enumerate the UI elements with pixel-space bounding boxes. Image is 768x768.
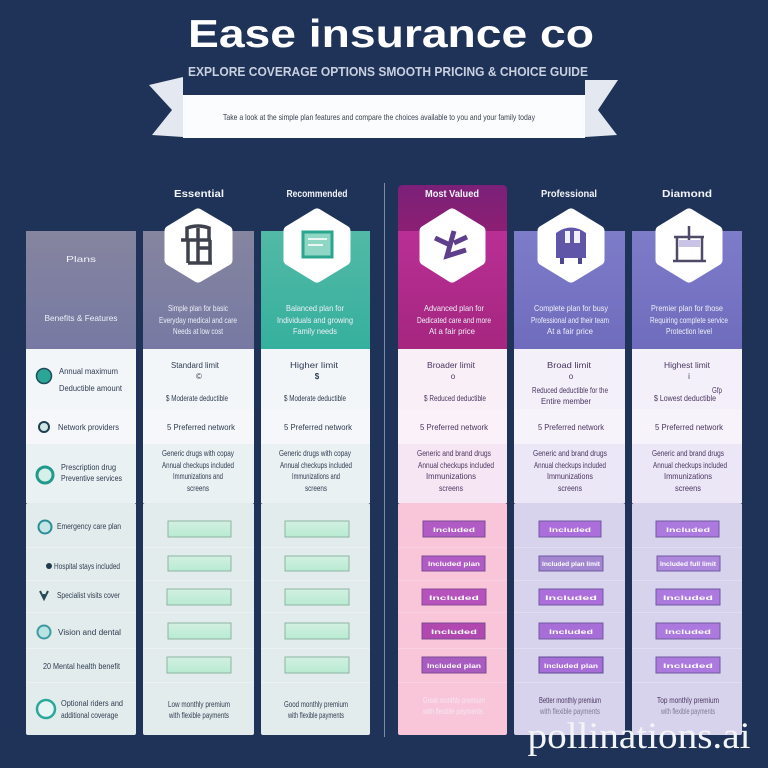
row values: Annual checkups included <box>653 461 727 470</box>
row values: Generic and brand drugs <box>652 449 724 458</box>
plan description: Simple plan for basic <box>168 303 229 313</box>
plan name: Recommended <box>286 189 348 200</box>
plan name: Diamond <box>662 189 712 200</box>
footer note <box>168 700 230 720</box>
row values: Annual checkups included <box>162 461 234 470</box>
plan name: Professional <box>541 189 597 200</box>
label: row 9 detail: additional coverage <box>61 711 118 720</box>
plan description: Individuals and growing <box>277 315 353 325</box>
plan name: Most Valued <box>425 189 479 200</box>
plan description <box>650 303 728 336</box>
row values: Higher limit <box>290 361 339 370</box>
purple included bars: Included full limit <box>660 561 717 568</box>
purple included bars: Included <box>549 527 591 534</box>
row values: Broader limit <box>427 361 476 370</box>
check bars <box>285 521 349 673</box>
plan description: Needs at low cost <box>173 326 223 336</box>
row values: Immunizations <box>547 472 593 481</box>
label: coverage: Annual maximum <box>59 367 118 376</box>
panel: plan 4 <box>514 189 625 735</box>
purple included bars: Included plan limit <box>542 561 601 568</box>
row values <box>162 361 236 493</box>
footer note: Better monthly premium <box>539 696 601 705</box>
row values: Immunizations <box>426 472 476 481</box>
row values: o <box>451 372 456 381</box>
purple included bars: Included plan <box>428 561 480 568</box>
plan description: Dedicated care and more <box>417 315 491 325</box>
plan description: At a fair price <box>429 326 475 336</box>
footer note <box>422 696 485 716</box>
purple included bars: Included <box>665 629 711 636</box>
footer note: Top monthly premium <box>657 696 719 705</box>
plan description: Requiring complete service <box>650 315 728 325</box>
icon: row 6 <box>40 591 48 599</box>
plan description: Advanced plan for <box>424 303 484 313</box>
footer note: Low monthly premium <box>168 700 230 709</box>
purple included bars <box>422 521 486 673</box>
row values: Generic drugs with copay <box>279 449 351 458</box>
check bars <box>167 521 231 673</box>
label: row 7: Vision and dental <box>58 628 121 637</box>
row values: Standard limit <box>171 361 220 370</box>
icon badge <box>170 214 227 277</box>
label: row 6: Specialist visits cover <box>57 591 120 600</box>
row values: Annual checkups included <box>280 461 352 470</box>
row values: 5 Preferred network <box>420 423 489 432</box>
row values: 5 Preferred network <box>167 423 236 432</box>
plan description: Balanced plan for <box>286 303 344 313</box>
plan description: Premier plan for those <box>651 303 723 313</box>
row values: $ Moderate deductible <box>166 394 228 403</box>
centre divider <box>384 183 385 737</box>
plan description: Protection level <box>666 326 712 336</box>
purple included bars <box>656 521 720 673</box>
plan description <box>277 303 353 336</box>
panel: plan 3 highlighted <box>398 185 507 735</box>
label: row 4: Emergency care plan <box>57 522 121 531</box>
row values: $ <box>315 372 320 381</box>
plan description: Everyday medical and care <box>159 315 237 325</box>
footer note: with flexible payments <box>168 711 229 720</box>
icon: coverage <box>36 368 52 384</box>
column heading: Plans <box>66 254 96 264</box>
footer note: Great monthly premium <box>423 696 485 705</box>
row values: Annual checkups included <box>534 461 606 470</box>
row values: o <box>569 372 574 381</box>
label: row 9: Optional riders and <box>61 699 123 708</box>
purple included bars: Included <box>433 527 475 534</box>
plan name: Essential <box>174 189 224 200</box>
footer note: with flexible payments <box>422 707 483 716</box>
purple included bars: Included <box>429 595 479 602</box>
footer note: with flexible payments <box>287 711 344 720</box>
row values: Generic and brand drugs <box>533 449 607 458</box>
column subheading: Benefits & Features <box>44 313 118 323</box>
row values: Broad limit <box>547 361 592 370</box>
panel: plan 2 <box>261 189 370 735</box>
watermark: pollinations.ai <box>528 716 750 757</box>
icon: row 5 <box>46 563 52 569</box>
purple included bars: Included <box>663 663 713 670</box>
label: row 5: Hospital stays included <box>54 562 120 571</box>
plan description: Family needs <box>293 326 337 336</box>
row values: screens <box>558 484 582 493</box>
icon: row 9 <box>37 700 55 718</box>
row values <box>417 361 494 493</box>
row values <box>279 361 353 493</box>
label: deductible: Network providers <box>58 423 119 432</box>
row values: Generic and brand drugs <box>417 449 491 458</box>
row values: $ Lowest deductible <box>654 394 716 403</box>
footer note <box>284 700 348 720</box>
row values: screens <box>187 484 209 493</box>
icon badge <box>289 214 345 277</box>
row values: Generic drugs with copay <box>162 449 234 458</box>
label: coverage detail: Deductible amount <box>59 384 123 393</box>
icon badge <box>661 214 717 277</box>
icon: copay <box>37 467 53 483</box>
row values: i <box>688 372 690 381</box>
label: row 8: 20 Mental health benefit <box>43 662 121 671</box>
purple included bars: Included <box>549 629 593 636</box>
icon: row 4 <box>38 520 52 534</box>
row values <box>532 361 608 493</box>
purple included bars: Included plan <box>544 663 598 670</box>
row values: Highest limit <box>664 361 711 370</box>
purple included bars: Included <box>431 629 477 636</box>
row values: Entire member <box>541 397 591 406</box>
row values: 5 Preferred network <box>284 423 353 432</box>
icon: deductible <box>39 422 49 432</box>
row values: 5 Preferred network <box>655 423 724 432</box>
label: copay detail: Preventive services <box>61 474 122 483</box>
row values: Annual checkups included <box>418 461 494 470</box>
ribbon banner <box>149 77 618 138</box>
purple included bars: Included <box>545 595 597 602</box>
purple included bars <box>539 521 603 673</box>
purple included bars: Included <box>663 595 713 602</box>
subtitle: EXPLORE COVERAGE OPTIONS SMOOTH PRICING & CHOICE GUIDE <box>188 64 588 79</box>
plan description: At a fair price <box>547 326 593 336</box>
row values: screens <box>305 484 327 493</box>
row values: screens <box>675 484 701 493</box>
plan description: Professional and their team <box>531 315 609 325</box>
row values: 5 Preferred network <box>538 423 605 432</box>
footer note: Good monthly premium <box>284 700 348 709</box>
plan description <box>159 303 237 336</box>
icon: row 7 <box>38 626 50 638</box>
plan description <box>531 303 609 336</box>
banner text: Take a look at the simple plan features and compare the choices available to you and your family today <box>223 112 536 122</box>
purple included bars: Included plan <box>427 663 481 670</box>
row values: $ Reduced deductible <box>424 394 486 403</box>
label: copay: Prescription drug <box>61 463 116 472</box>
panel: plan 1 <box>143 189 254 735</box>
icon badge <box>425 214 480 277</box>
panel: feature labels column <box>26 231 136 735</box>
row values: Immunizations and <box>292 472 340 481</box>
row values: Immunizations <box>664 472 712 481</box>
title: Ease insurance co <box>188 13 594 56</box>
purple included bars: Included <box>666 527 710 534</box>
row values: $ Moderate deductible <box>284 394 346 403</box>
row values: © <box>196 372 202 381</box>
footer note: with flexible payments <box>539 707 600 716</box>
panel: plan 5 <box>632 189 742 735</box>
footer note: with flexible payments <box>660 707 715 716</box>
row values: Gfp <box>712 386 722 395</box>
row values <box>652 361 727 493</box>
footer note <box>657 696 719 716</box>
row values: Immunizations and <box>173 472 223 481</box>
row values: Reduced deductible for the <box>532 386 608 395</box>
plan description <box>417 303 491 336</box>
row values: screens <box>439 484 463 493</box>
icon badge <box>543 214 599 277</box>
plan description: Complete plan for busy <box>534 303 609 313</box>
footer note <box>539 696 601 716</box>
